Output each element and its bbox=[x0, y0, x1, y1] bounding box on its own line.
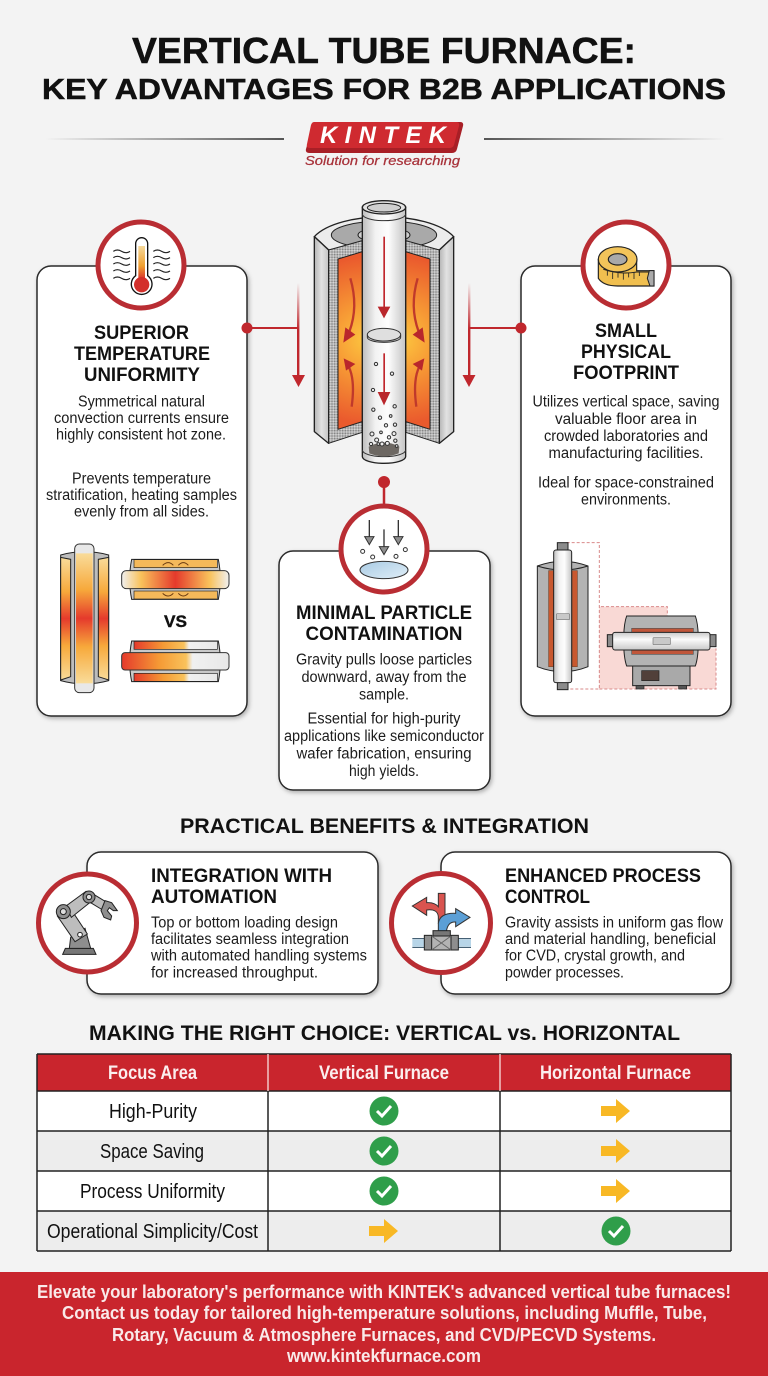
text: ideal environments bbox=[538, 474, 714, 508]
text: process control description: powder processes. bbox=[505, 964, 624, 982]
comparison table bbox=[37, 1054, 731, 1251]
heading: superior temperature uniformity: SUPERIOR bbox=[94, 323, 189, 344]
row labels: Process Uniformity bbox=[80, 1181, 225, 1203]
text: gravity description bbox=[296, 652, 472, 704]
panel: minimal particle contamination bbox=[279, 551, 490, 790]
heading: minimal particle contamination: CONTAMINATION bbox=[306, 624, 462, 645]
label: VS: VS bbox=[164, 612, 187, 631]
heading: small physical footprint: FOOTPRINT bbox=[573, 363, 679, 384]
heading: small physical footprint: SMALL bbox=[595, 321, 657, 342]
heading: enhanced process control: ENHANCED PROCESS bbox=[505, 866, 701, 887]
heading: superior temperature uniformity: TEMPERATURE bbox=[74, 344, 210, 365]
heading: minimal particle contamination: MINIMAL PARTICLE bbox=[296, 603, 472, 624]
panel: integration with automation bbox=[38, 852, 378, 994]
text: convection description bbox=[54, 394, 229, 444]
text: gravity description: downward, away from the bbox=[302, 669, 466, 686]
text: floor space description bbox=[532, 394, 720, 462]
text: high-purity applications: applications like semiconductor bbox=[284, 728, 484, 745]
KINTEK logo: KINTEK bbox=[320, 122, 448, 149]
footer call to action bbox=[0, 1272, 768, 1376]
text: gravity description: Gravity pulls loose particles bbox=[296, 652, 472, 668]
heading: superior temperature uniformity: UNIFORMITY bbox=[84, 365, 200, 386]
icon: thermometer badge bbox=[98, 222, 184, 308]
text: floor space description: valuable floor area in bbox=[555, 411, 697, 428]
text: ideal environments: environments. bbox=[581, 492, 671, 508]
row labels bbox=[47, 1101, 258, 1243]
text: automation description: with automated handling systems bbox=[150, 948, 367, 964]
footer call to action: www.kintekfurnace.com bbox=[286, 1346, 481, 1366]
title bbox=[42, 30, 726, 106]
text: process control description: and material handling, beneficial bbox=[505, 931, 716, 948]
heading: integration with automation: AUTOMATION bbox=[151, 887, 277, 908]
icon: tape measure badge bbox=[583, 222, 669, 308]
icon: particles falling on wafer badge bbox=[341, 506, 427, 592]
text: process control description bbox=[505, 914, 724, 982]
illustration: footprint comparison bbox=[537, 543, 716, 690]
heading: small physical footprint: PHYSICAL bbox=[581, 342, 671, 363]
text: automation description: for increased throughput. bbox=[151, 964, 318, 982]
heading: enhanced process control bbox=[505, 866, 701, 908]
icon: robot arm badge bbox=[38, 874, 136, 972]
text: convection description: convection currents ensure bbox=[54, 410, 229, 427]
text: process control description: Gravity assists in uniform gas flow bbox=[505, 914, 724, 932]
text: automation description: Top or bottom loading design bbox=[151, 914, 338, 932]
text: convection description: Symmetrical natural bbox=[78, 394, 205, 410]
heading: practical benefits and integration: PRACTICAL BENEFITS & INTEGRATION bbox=[180, 815, 589, 838]
text: ideal environments: Ideal for space-constrained bbox=[538, 474, 714, 492]
row labels: Space Saving bbox=[100, 1141, 204, 1163]
title: KEY ADVANTAGES FOR B2B APPLICATIONS bbox=[42, 74, 726, 106]
text: floor space description: manufacturing facilities. bbox=[548, 445, 704, 462]
text: automation description: facilitates seamless integration bbox=[151, 931, 349, 948]
heading: integration with automation: INTEGRATION WITH bbox=[151, 866, 332, 887]
text: stratification description: Prevents temperature bbox=[72, 470, 211, 488]
footer call to action: Contact us today for tailored high-temperature solutions, including Muffle, Tube, bbox=[62, 1303, 707, 1323]
panel: small physical footprint bbox=[521, 266, 731, 716]
row labels: High-Purity bbox=[109, 1101, 197, 1123]
connector: center card to furnace bbox=[378, 476, 390, 505]
icon: green checks bbox=[370, 1096, 630, 1246]
illustration: vertical vs horizontal heating bbox=[61, 544, 229, 693]
furnace cutaway illustration bbox=[314, 201, 454, 463]
icon: valve and flow arrows badge bbox=[392, 874, 490, 972]
text: high-purity applications: high yields. bbox=[349, 763, 419, 780]
text: stratification description: stratification, heating samples bbox=[46, 487, 237, 504]
text: floor space description: crowded laboratories and bbox=[544, 428, 708, 445]
title: VERTICAL TUBE FURNACE: bbox=[132, 30, 636, 71]
text: convection description: highly consistent hot zone. bbox=[56, 426, 226, 444]
table header: Vertical Furnace bbox=[319, 1063, 449, 1084]
icon: yellow arrows bbox=[369, 1099, 630, 1243]
text: high-purity applications: wafer fabrication, ensuring bbox=[296, 746, 472, 762]
text: high-purity applications: Essential for high-purity bbox=[308, 710, 461, 728]
table header: Horizontal Furnace bbox=[540, 1063, 691, 1084]
footer call to action: Elevate your laboratory's performance with KINTEK's advanced vertical tube furnaces! bbox=[37, 1282, 731, 1302]
heading: enhanced process control: CONTROL bbox=[505, 887, 590, 908]
heading: small physical footprint bbox=[573, 321, 679, 384]
connector: right card to furnace bbox=[462, 283, 526, 387]
KINTEK logo bbox=[305, 122, 463, 168]
panel: superior temperature uniformity bbox=[37, 266, 247, 716]
text: process control description: for CVD, crystal growth, and bbox=[505, 948, 685, 964]
text: automation description bbox=[150, 914, 367, 982]
heading: minimal particle contamination bbox=[296, 603, 472, 645]
panel: enhanced process control bbox=[392, 852, 731, 994]
text: floor space description: Utilizes vertical space, saving bbox=[532, 394, 720, 410]
connector: left card to furnace bbox=[242, 283, 305, 387]
heading: making the right choice: MAKING THE RIGHT CHOICE: VERTICAL vs. HORIZONTAL bbox=[89, 1022, 680, 1045]
row labels: Operational Simplicity/Cost bbox=[47, 1221, 258, 1243]
table header bbox=[108, 1063, 691, 1084]
text: gravity description: sample. bbox=[359, 686, 409, 704]
text: stratification description bbox=[46, 470, 237, 520]
text: stratification description: evenly from all sides. bbox=[74, 504, 209, 520]
footer call to action: Rotary, Vacuum & Atmosphere Furnaces, and CVD/PECVD Systems. bbox=[112, 1325, 656, 1345]
heading: superior temperature uniformity bbox=[74, 323, 210, 386]
table header: Focus Area bbox=[108, 1063, 197, 1084]
text: high-purity applications bbox=[284, 710, 484, 780]
KINTEK logo: Solution for researching bbox=[305, 153, 461, 168]
heading: integration with automation bbox=[151, 866, 332, 908]
